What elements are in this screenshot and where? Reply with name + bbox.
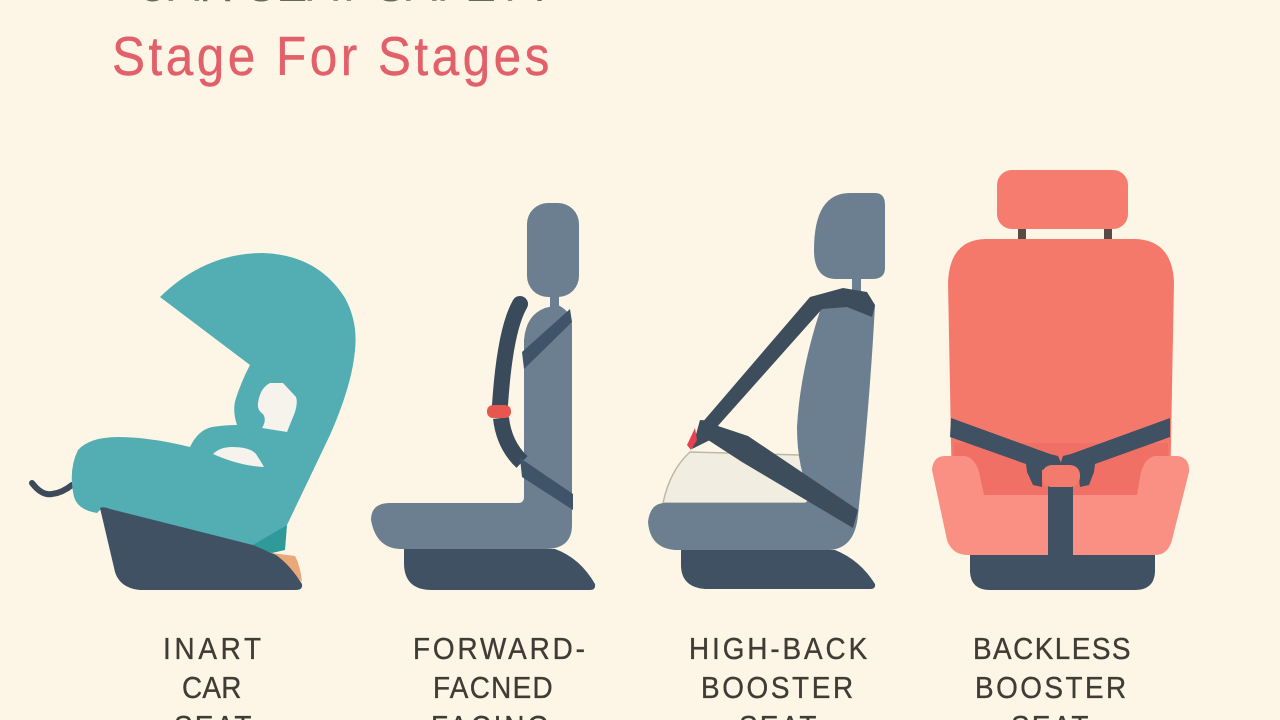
icon: lap band [520, 458, 573, 510]
label: infant car seat: CAR [182, 671, 241, 705]
icon: dark base [100, 507, 302, 590]
icon: side bolsters [932, 456, 1189, 555]
label: backless booster seat [973, 632, 1130, 720]
panel: infant car seat [32, 253, 356, 590]
icon: center strap [1048, 485, 1073, 557]
icon: seat back and cushion [371, 305, 572, 549]
icon: lap belt [705, 424, 858, 528]
label: backless booster seat: BOOSTER [975, 671, 1126, 705]
icon: base [681, 550, 875, 589]
icon: lower strap [501, 418, 522, 462]
icon: headrest posts [1018, 225, 1112, 243]
icon: red buckle [687, 428, 697, 450]
label: infant car seat [163, 632, 261, 720]
icon: inner seat shade [954, 443, 1168, 497]
panel: forward-facing seat [371, 203, 595, 590]
icon: base [404, 549, 595, 590]
icon: red buckle [487, 405, 511, 418]
icon: peach foot [272, 553, 302, 582]
icon: white head pad [258, 383, 297, 432]
label: forward-facing seat: FACNED [433, 671, 553, 705]
label: high-back booster seat [689, 632, 868, 720]
label: backless booster seat: BACKLESS [973, 632, 1131, 666]
icon: belt clip [692, 420, 717, 449]
icon: cream booster cushion [663, 452, 812, 503]
icon: seat back and cushion [648, 305, 875, 550]
label: forward-facing seat [413, 632, 585, 720]
icon: tether strap [32, 483, 72, 494]
icon: right belt [1060, 418, 1170, 487]
icon: teal shell underside [250, 525, 287, 553]
label: infant car seat: INART [163, 632, 261, 666]
icon: seat back [948, 239, 1174, 495]
panel: backless booster seat [932, 170, 1189, 590]
icon: neck post [852, 277, 861, 291]
icon: teal infant seat shell [72, 253, 356, 545]
label: forward-facing seat: FORWARD- [413, 632, 585, 666]
icon: base [970, 550, 1155, 590]
icon: buckle [1042, 465, 1080, 487]
icon: shoulder belt [701, 288, 875, 428]
icon: neck post [550, 295, 559, 309]
icon: headrest [814, 193, 885, 279]
icon: headrest [997, 170, 1128, 229]
label: high-back booster seat: HIGH-BACK [689, 632, 868, 666]
subtitle: Stage For Stages [112, 27, 549, 88]
icon: left belt [950, 418, 1062, 487]
icon: chest band [522, 309, 572, 369]
panel: high-back booster seat [648, 193, 885, 589]
icon: headrest [527, 203, 579, 297]
label: high-back booster seat: BOOSTER [701, 671, 853, 705]
icon: white chest pad [213, 447, 264, 467]
icon: shoulder strap [500, 304, 520, 405]
